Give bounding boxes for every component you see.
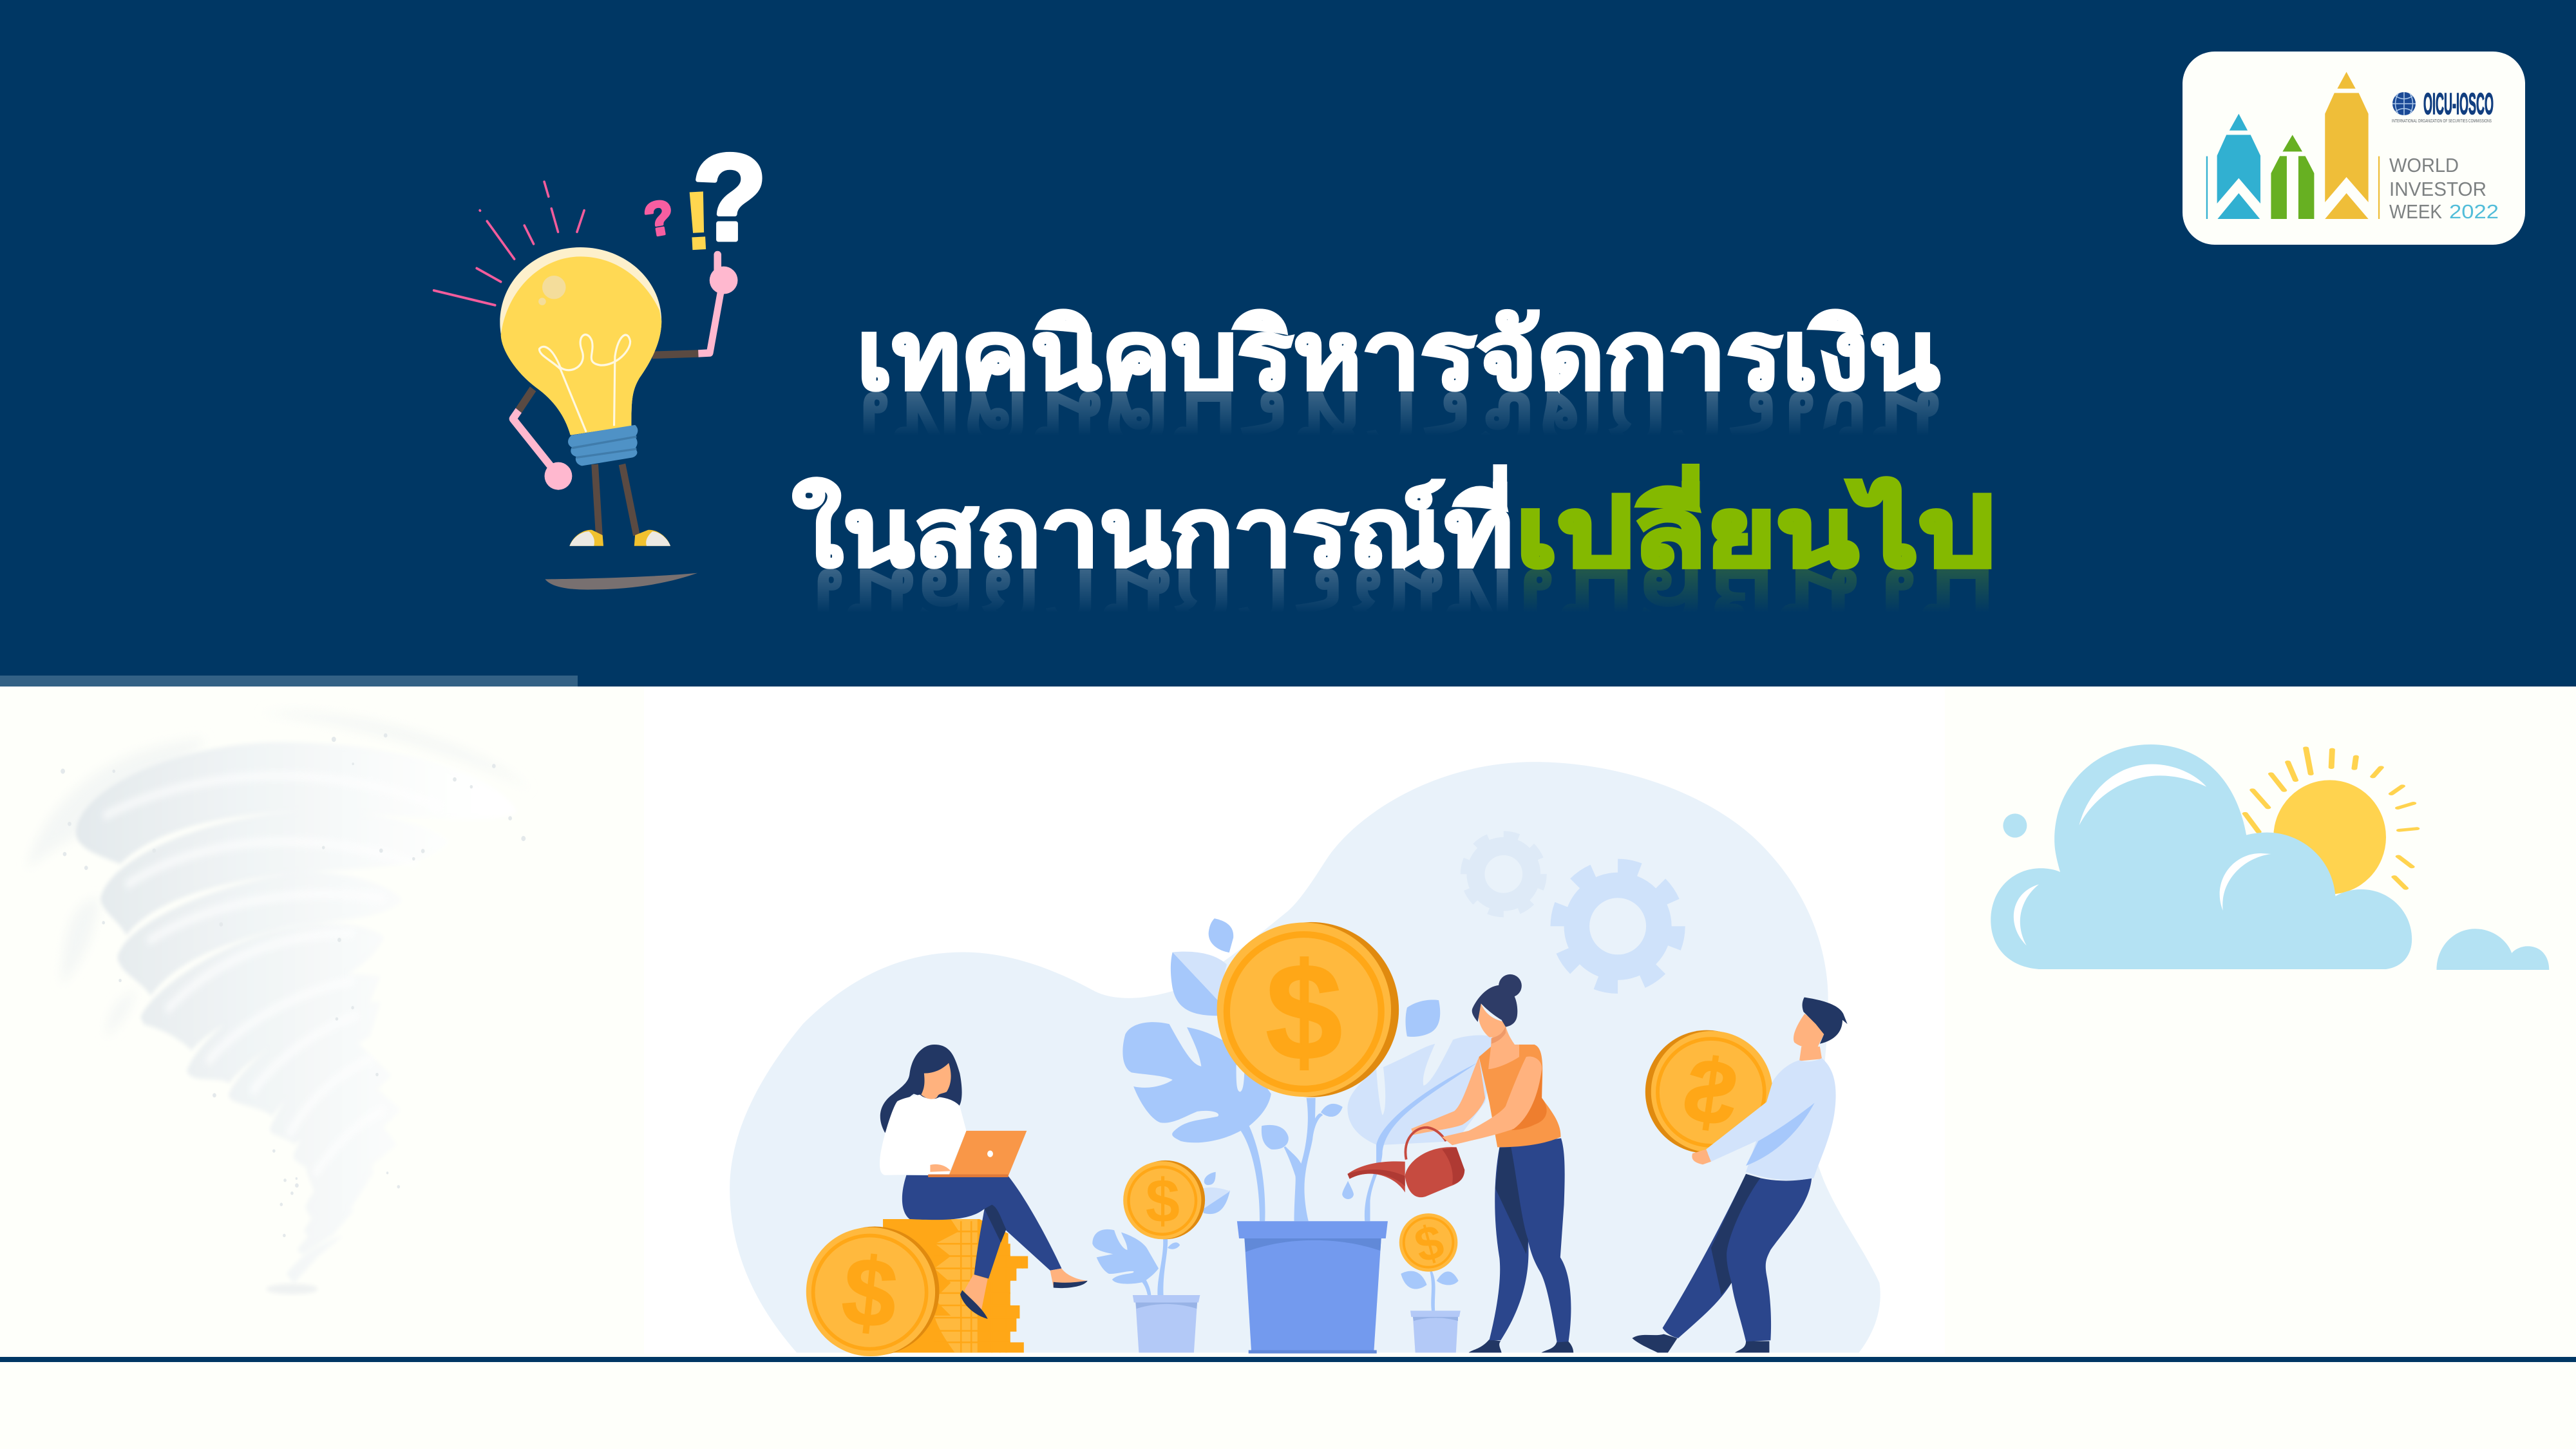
exclamation mark: ! [682, 175, 714, 267]
World Investor Week text: INVESTOR [2389, 178, 2486, 200]
small pot [1133, 1295, 1200, 1352]
hair bun [1499, 974, 1522, 998]
medium coin: $ [1146, 1167, 1180, 1236]
pale monstera leaf [1284, 1000, 1497, 1221]
face [1794, 1014, 1824, 1048]
laptop [949, 1131, 1027, 1176]
torso and arm [1706, 1058, 1836, 1180]
water drop [1342, 1181, 1354, 1199]
hand [930, 1164, 951, 1172]
arm holding can [1411, 1057, 1485, 1135]
small right coin plant [1399, 1213, 1461, 1352]
hands [545, 251, 738, 490]
bulb fill [501, 256, 661, 435]
front arm [1442, 1056, 1542, 1145]
small right coin plant: $ [1409, 1214, 1449, 1273]
small cloud [2436, 929, 2549, 970]
hair [1472, 985, 1517, 1027]
coin stack [883, 1219, 1028, 1352]
header band [0, 0, 2576, 687]
yellow pencil [2325, 72, 2380, 219]
sun [2273, 780, 2386, 895]
blue pencil [2206, 114, 2260, 219]
rays [434, 182, 584, 305]
main cloud [1991, 744, 2412, 969]
question mark small: ? [640, 189, 678, 247]
tornado outer haze [26, 712, 533, 1037]
tornado funnel bands [76, 742, 518, 1283]
bulb shadow [545, 573, 697, 590]
trousers [1489, 1138, 1571, 1342]
logo card [2183, 52, 2525, 245]
title highlighted words: เปลี่ยนไป [1516, 466, 1994, 586]
bottom rule [0, 1357, 2576, 1362]
card background [2183, 52, 2525, 245]
man carrying coin [1632, 998, 1848, 1352]
shoes [1632, 1334, 1769, 1352]
cloud dot [2003, 813, 2027, 838]
big coin [1217, 922, 1399, 1097]
tornado [26, 712, 533, 1294]
sun rays [2245, 748, 2417, 888]
title line 2 reflection: ในสถานการณ์ที่ [792, 550, 1513, 670]
small plant [1092, 1172, 1230, 1297]
tornado white streaks [104, 776, 444, 1175]
shoes [569, 530, 670, 546]
background blob [730, 762, 1880, 1352]
big held coin: $ [1679, 1039, 1743, 1146]
neck [1799, 1046, 1822, 1061]
big pot [1237, 1221, 1388, 1354]
big gear [1560, 868, 1676, 985]
monstera leaf [1122, 1022, 1271, 1142]
small gear [1466, 837, 1541, 912]
tornado ground shadow [266, 1284, 318, 1294]
neck and chest [1488, 1026, 1519, 1069]
lightbulb character [434, 182, 738, 590]
question mark large: ? [692, 129, 767, 266]
woman with laptop [880, 1045, 1088, 1319]
pencil marks [2206, 72, 2380, 219]
face [921, 1063, 951, 1099]
illustration: growing money [730, 762, 1880, 1356]
hair [1803, 998, 1848, 1044]
shoes [1469, 1340, 1573, 1352]
illustration backdrop [644, 687, 1945, 1354]
title line 2 reflection: เปลี่ยนไป [1516, 550, 1994, 670]
left coin: $ [837, 1236, 902, 1349]
title [792, 303, 1994, 670]
torso [1479, 1045, 1560, 1147]
top [880, 1095, 967, 1175]
woman watering plants [1347, 974, 1573, 1352]
big plant [1122, 918, 1289, 1221]
green pencil [2271, 135, 2314, 219]
arms and legs [513, 289, 721, 535]
cloud and sun [1991, 744, 2549, 970]
medium coin [1123, 1160, 1205, 1239]
big coin: $ [1265, 936, 1342, 1089]
World Investor Week text: 2022 [2449, 200, 2499, 223]
tornado debris dots [61, 734, 526, 1237]
hair [880, 1045, 962, 1133]
extended foot [1050, 1269, 1087, 1287]
title line 1 reflection: เทคนิคบริหารจัดการเงิน [857, 373, 1940, 479]
bulb glass [500, 247, 661, 435]
trousers [902, 1175, 1062, 1279]
trousers [1663, 1174, 1812, 1341]
face [1479, 1003, 1506, 1037]
watering can [1347, 1128, 1464, 1197]
bulb screw base [568, 425, 638, 466]
World Investor Week text: WORLD [2389, 154, 2459, 176]
hand [1692, 1150, 1711, 1164]
OICU-IOSCO tagline: INTERNATIONAL ORGANIZATION OF SECURITIES COMMISSIONS [2392, 119, 2492, 124]
World Investor Week text: WEEK [2389, 200, 2442, 223]
World Investor Week text [2389, 154, 2499, 223]
left coin [806, 1227, 939, 1356]
globe icon [2392, 92, 2416, 115]
gears [1466, 837, 1676, 985]
raised foot [965, 1274, 988, 1309]
cloud highlights [2014, 764, 2271, 945]
big held coin [1645, 1030, 1773, 1153]
filament [539, 335, 630, 432]
title line 2 reflection [792, 550, 1994, 670]
title line 1: เทคนิคบริหารจัดการเงิน [857, 303, 1940, 409]
header accent bar [0, 676, 578, 687]
bulb shine [538, 276, 566, 305]
title line 2: ในสถานการณ์ที่ [792, 466, 1513, 586]
